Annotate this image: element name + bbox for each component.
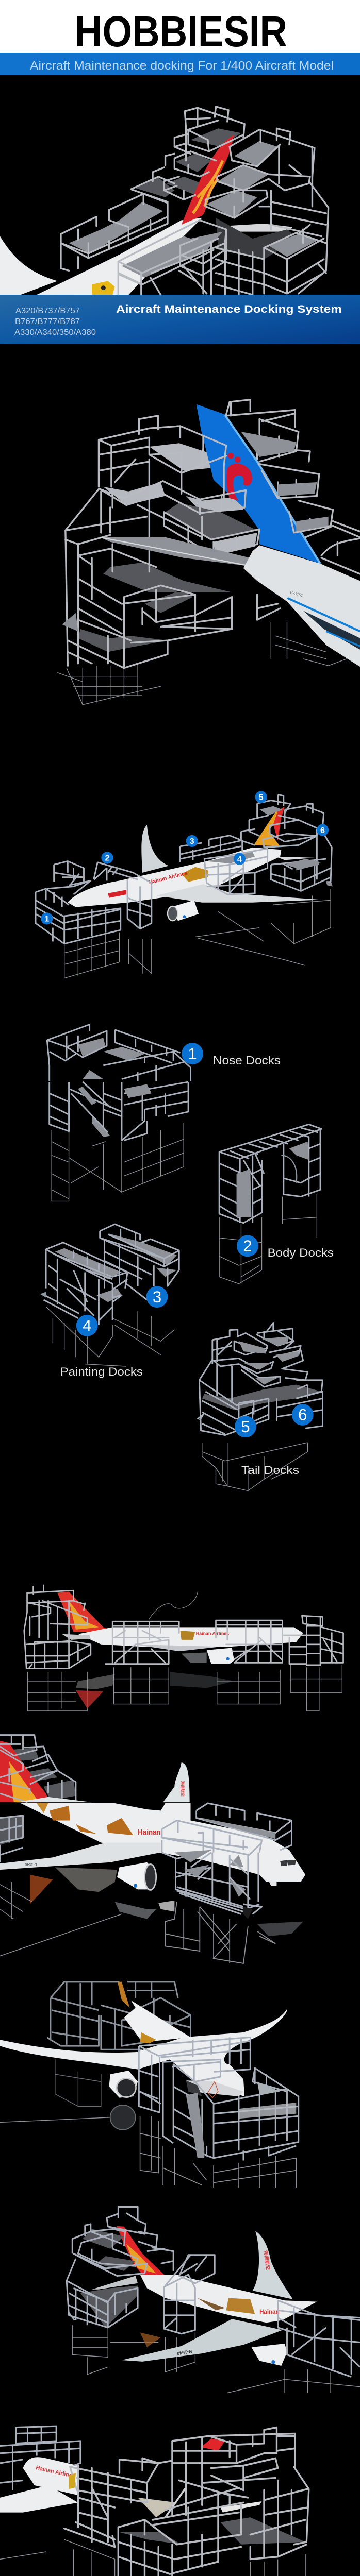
tail fin (254, 807, 285, 846)
callouts 1-6: 1 (44, 914, 49, 924)
photo: full docking layout with numbered callouts (36, 791, 333, 978)
reflection (202, 1443, 308, 1490)
callouts 3 and 4: 3 (153, 1288, 161, 1306)
aircraft winglet and vertical wing (141, 825, 169, 873)
reflection (57, 622, 347, 705)
header: brand title: HOBBIESIR (75, 7, 287, 56)
photo: wide view through docks (0, 2426, 309, 2576)
mirrored plane art reflection (55, 1867, 117, 1892)
icon: nose dock scaffold lower part (50, 1082, 188, 1201)
callout 2: 2 (243, 1237, 252, 1255)
icon: nose dock scaffold upper part (47, 1025, 191, 1081)
aircraft: Hainan Airlines (196, 1631, 229, 1636)
rear painting dock (197, 1803, 291, 1850)
tail docks component (198, 1323, 323, 1490)
tail fin (182, 135, 234, 225)
compatible aircraft list: A330/A340/350/A380 (14, 328, 96, 337)
tether wire (149, 1591, 198, 1620)
wings and fuselage (0, 2009, 287, 2096)
lower banner (0, 295, 360, 344)
header: brand title (0, 0, 360, 56)
tail (117, 2226, 166, 2276)
reflection (27, 1665, 342, 1711)
callouts 1-6: 4 (237, 855, 242, 864)
photo: rear three-quarter view with tail docks: Hainan (259, 2308, 280, 2316)
nose docks component (47, 1025, 281, 1201)
wings (156, 884, 321, 903)
callouts 3 and 4 (76, 1286, 168, 1336)
engine (117, 1862, 156, 1890)
reflection (64, 889, 331, 978)
reflection (72, 2325, 360, 2393)
photo: full docking layout with numbered callouts: Hainan Airlines (148, 870, 188, 886)
mascot figure on fuselage (92, 281, 115, 295)
photo: rear three-quarter view with tail docks: B-1540 (177, 2349, 192, 2356)
wing up (253, 2231, 293, 2299)
photo: rear three-quarter view with tail docks (67, 2207, 360, 2393)
fuselage (68, 848, 281, 907)
callouts 1-6: 6 (320, 826, 325, 835)
compatible aircraft list: A320/B737/B757 (15, 307, 80, 315)
label: Tail Docks (241, 1464, 299, 1477)
header: blue subtitle band: Aircraft Maintenance docking For 1/400 Aircraft Model (30, 59, 334, 72)
label: Painting Docks (60, 1365, 143, 1378)
horizontal stabilizer (100, 537, 262, 568)
engine (168, 900, 199, 921)
engine (251, 2344, 287, 2366)
engine (109, 2071, 138, 2098)
fuselage (140, 2275, 317, 2323)
photo: aircraft with nose dock in front, tail docks behind (0, 1735, 305, 1963)
header: blue subtitle band (0, 53, 360, 75)
aircraft on floor glass (139, 2037, 250, 2112)
nose gear (269, 1881, 276, 1886)
label: Nose Docks (213, 1054, 281, 1067)
photo: side view of aircraft with docks (24, 1585, 343, 1711)
photo: front view with nose docks, tail docks out of focus behind (0, 1982, 299, 2188)
callouts 5 and 6: 6 (298, 1406, 307, 1424)
photo: aircraft with nose dock in front, tail docks behind: B-1540 (25, 1862, 37, 1867)
reflection (52, 1123, 184, 1201)
callout 2 (237, 1235, 258, 1257)
callout badge 1 (182, 1043, 203, 1064)
photo: tail docks around Hainan aircraft, top view (0, 107, 329, 295)
aircraft (57, 1591, 303, 1664)
blurred rear docks (47, 1982, 191, 2049)
reflection (166, 1902, 275, 1963)
compatible aircraft list (14, 307, 96, 337)
callouts 1-6 (41, 791, 329, 924)
callouts 1-6: 3 (190, 837, 194, 846)
fuselage and art (21, 1803, 305, 1882)
painting docks component (40, 1224, 179, 1378)
fuselage (243, 545, 360, 667)
banner heading: Aircraft Maintenance Docking System (116, 303, 342, 315)
callouts 1-6: 5 (259, 793, 264, 802)
photo: rear three-quarter view with tail docks: 海南航空 (263, 2250, 271, 2270)
photo: tail docks around China Southern 747 (57, 400, 360, 705)
callouts 5 and 6: 5 (241, 1418, 250, 1436)
near wing (122, 2319, 283, 2362)
reflection (140, 2116, 296, 2188)
photo: wide view through docks: Hainan Airlines (35, 2465, 75, 2480)
cockpit (280, 1860, 296, 1866)
photo: aircraft with nose dock in front, tail docks behind: 海南航空 (181, 1781, 186, 1797)
photo: aircraft with nose dock in front, tail docks behind: Hainan (138, 1828, 161, 1836)
body docks component (219, 1124, 334, 1284)
callouts 1-6: 2 (105, 854, 109, 863)
callouts 3 and 4: 4 (83, 1316, 91, 1334)
compatible aircraft list: B767/B777/B787 (15, 317, 80, 326)
label: Body Docks (268, 1246, 334, 1259)
registration: B-2461 (289, 590, 304, 598)
callout badge 1: 1 (188, 1045, 197, 1063)
callouts 5 and 6 (235, 1404, 314, 1437)
